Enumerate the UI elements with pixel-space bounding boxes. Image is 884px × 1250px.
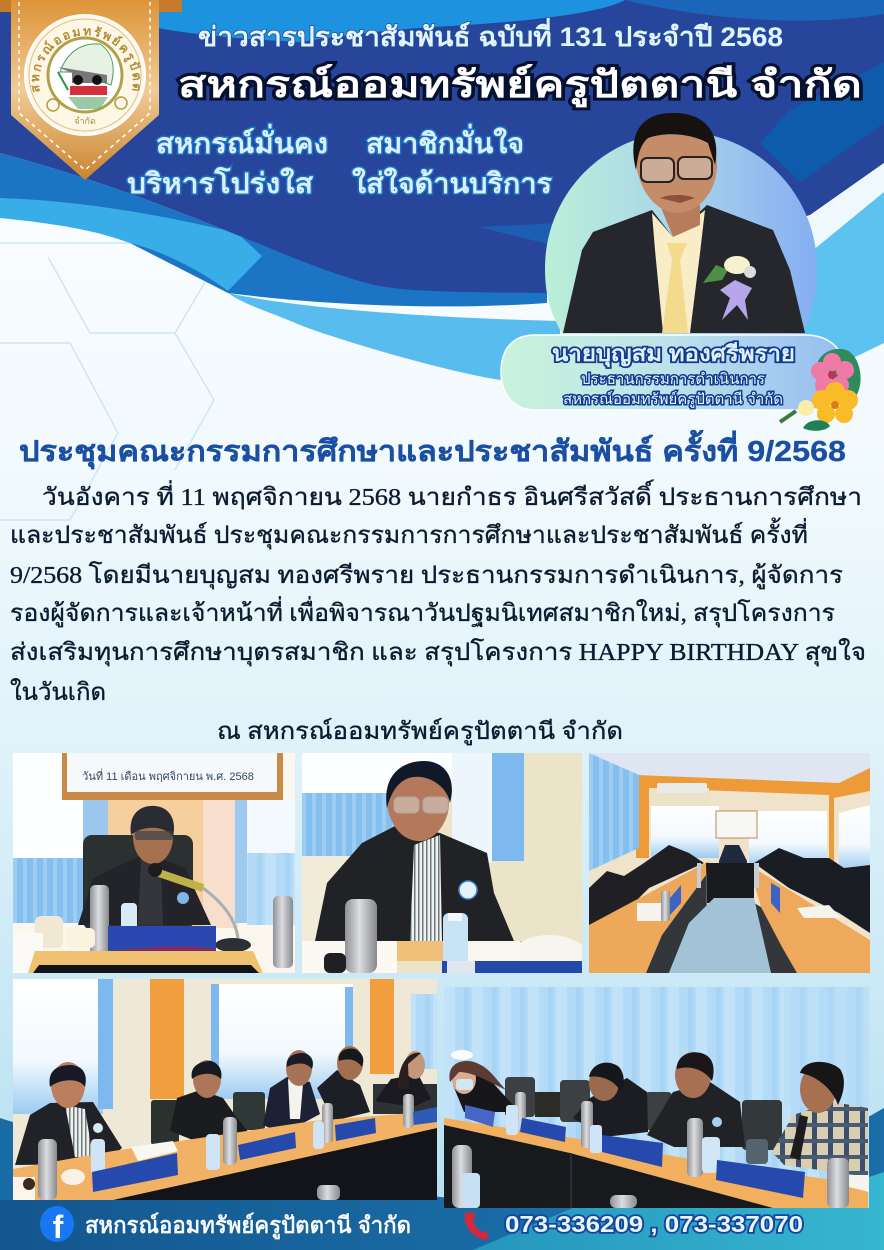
article body text: วันอังคาร ที่ 11 พฤศจิกายน 2568 นายกำธร อินศรีสวัสดิ์ ประธานการศึกษา xyxy=(42,479,862,511)
photo: chairman of education speaking: วันที่ 11 เดือน พฤศจิกายน พ.ศ. 2568 xyxy=(82,768,254,783)
flower decoration xyxy=(780,349,861,431)
meeting heading: ประชุมคณะกรรมการศึกษาและประชาสัมพันธ์ ครั้งที่ 9/2568 xyxy=(19,429,846,469)
slogan: สมาชิกมั่นใจ xyxy=(366,123,524,159)
photo: meeting room overview xyxy=(589,753,870,973)
chairman role xyxy=(563,371,783,408)
article body text: รองผู้จัดการและเจ้าหน้าที่ เพื่อพิจารณาวันปฐมนิเทศสมาชิกใหม่, สรุปโครงการ xyxy=(10,596,835,628)
slogan: สหกรณ์มั่นคง xyxy=(156,123,328,159)
icon: phone xyxy=(465,1212,488,1240)
icon: facebook: f xyxy=(53,1209,64,1245)
hexagon background pattern xyxy=(0,190,760,1000)
photo: committee members right side xyxy=(444,987,869,1208)
logo seal: จำกัด xyxy=(74,116,96,126)
photo: chairman of education speaking xyxy=(13,753,295,973)
chairman name: นายบุญสม ทองศรีพราย xyxy=(552,341,795,368)
bottom wave xyxy=(0,1108,884,1250)
article body text: ณ สหกรณ์ออมทรัพย์ครูปัตตานี จำกัด xyxy=(217,717,623,746)
photo: committee members left side xyxy=(13,979,437,1200)
slogan: ใส่ใจด้านบริการ xyxy=(352,167,552,199)
portrait of chairman xyxy=(545,113,817,335)
phone numbers: 073-336209 , 073-337070 xyxy=(505,1211,803,1237)
article body text: และประชาสัมพันธ์ ประชุมคณะกรรมการการศึกษาและประชาสัมพันธ์ ครั้งที่ xyxy=(10,517,808,550)
article body text: ในวันเกิด xyxy=(10,678,106,706)
article body text xyxy=(10,479,866,746)
ribbon with logo xyxy=(0,0,182,180)
organization title: สหกรณ์ออมทรัพย์ครูปัตตานี จำกัด xyxy=(178,64,862,108)
chairman role: ประธานกรรมการดำเนินการ xyxy=(581,371,765,388)
article body text: ส่งเสริมทุนการศึกษาบุตรสมาชิก และ สรุปโครงการ HAPPY BIRTHDAY สุขใจ xyxy=(10,638,866,667)
logo seal xyxy=(24,14,146,136)
facebook page name: สหกรณ์ออมทรัพย์ครูปัตตานี จำกัด xyxy=(85,1212,411,1240)
issue line: ข่าวสารประชาสัมพันธ์ ฉบับที่ 131 ประจำปี 2568 xyxy=(198,17,783,52)
slogan xyxy=(127,123,552,199)
chairman role: สหกรณ์ออมทรัพย์ครูปัตตานี จำกัด xyxy=(563,391,783,408)
photo: chairman seated xyxy=(302,753,582,973)
article body text: 9/2568 โดยมีนายบุญสม ทองศรีพราย ประธานกรรมการดำเนินการ, ผู้จัดการ xyxy=(10,561,843,590)
footer bar xyxy=(0,1200,803,1250)
portrait disc xyxy=(545,132,817,335)
slogan: บริหารโปร่งใส xyxy=(127,166,314,199)
header wave background xyxy=(0,0,884,385)
icon: facebook xyxy=(40,1206,74,1245)
name plate xyxy=(501,335,845,410)
